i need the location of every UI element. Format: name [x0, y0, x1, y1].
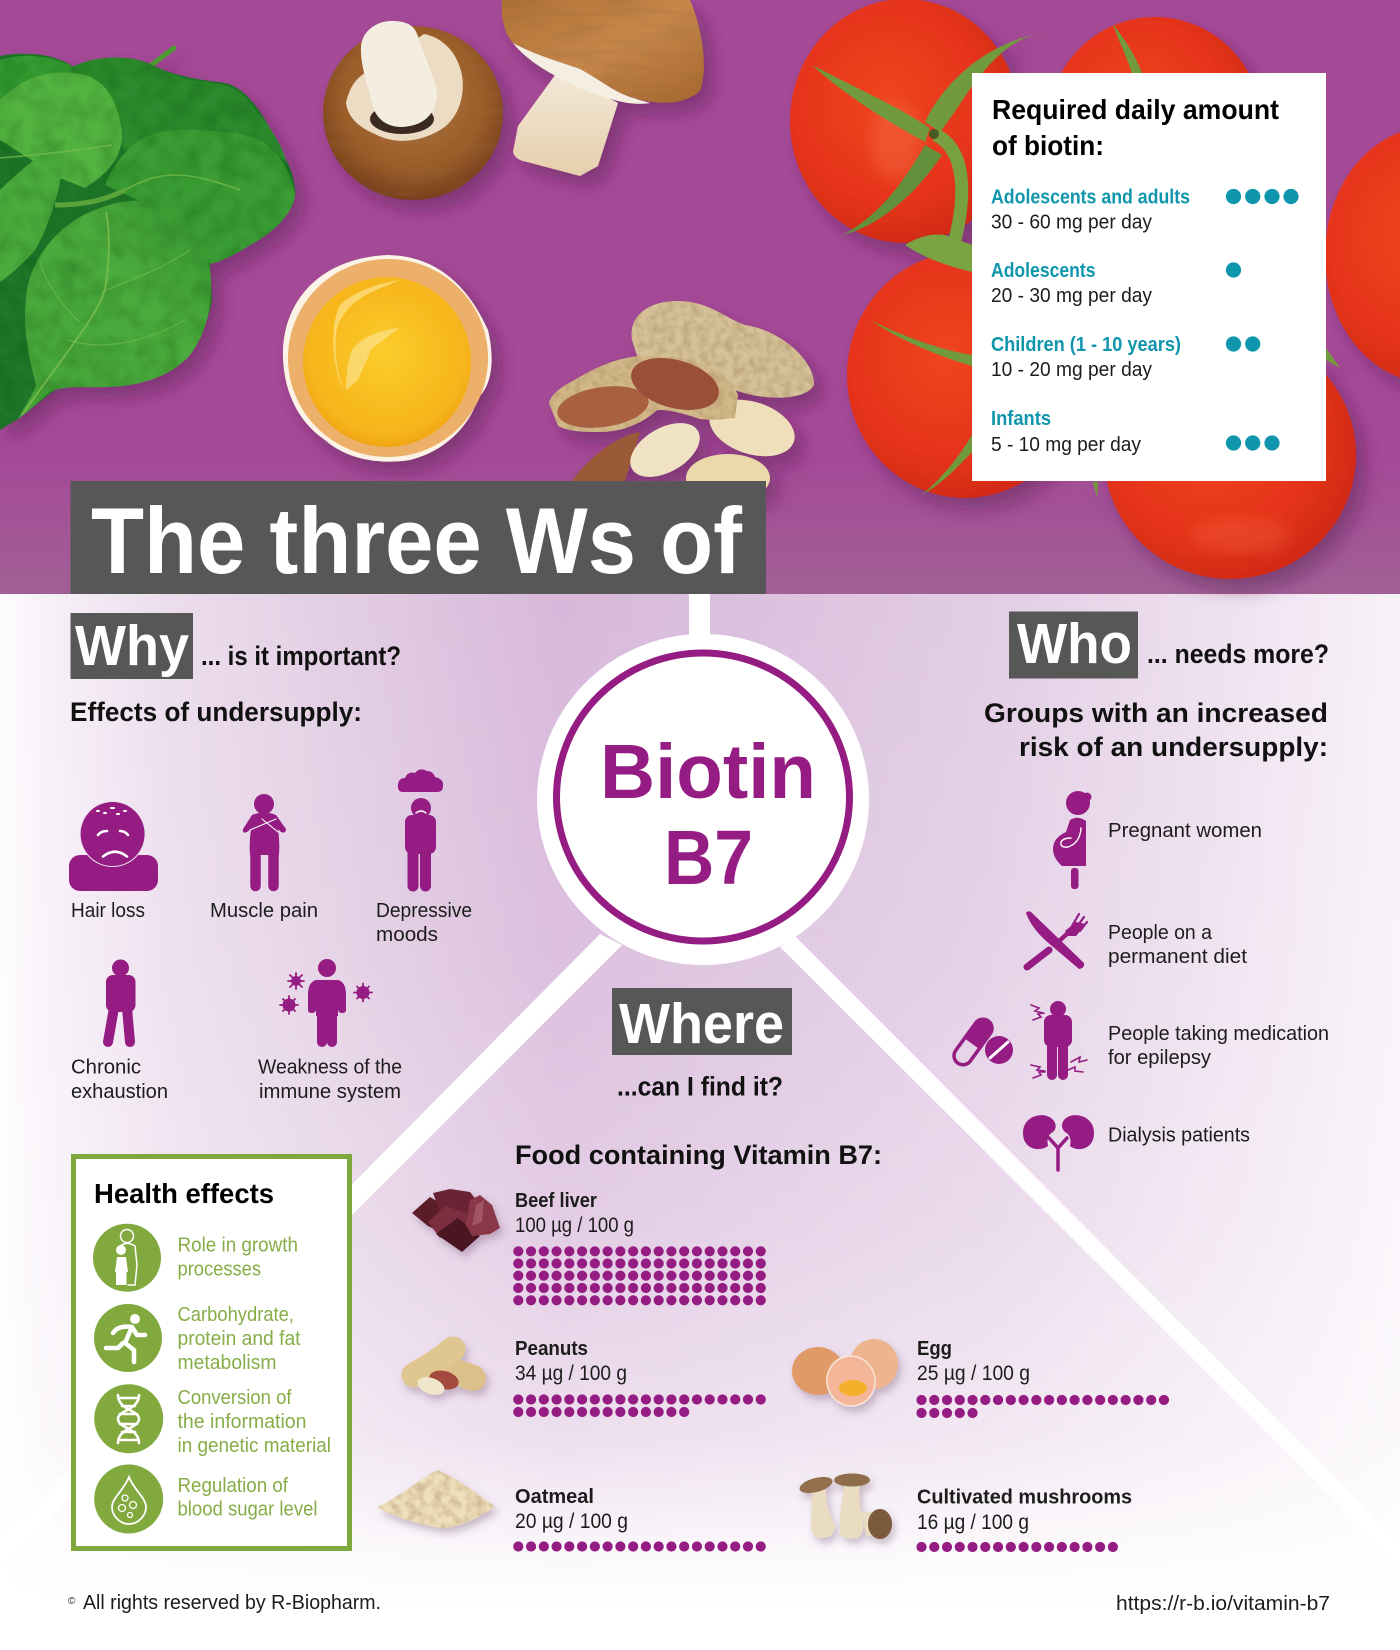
why heading	[70, 613, 401, 679]
food: cultivated mushrooms text and dots: 16 µg / 100 g	[917, 1511, 1029, 1534]
row: adolescents: 20 - 30 mg per day	[991, 284, 1153, 307]
card heading	[992, 94, 1279, 161]
central biotin circle: Biotin	[600, 729, 816, 815]
food: beef liver text and dots	[515, 1189, 762, 1300]
food: cultivated mushrooms photo	[798, 1474, 892, 1539]
footer: copyright: All rights reserved by R-Biopharm.	[83, 1591, 381, 1614]
where heading: ...can I find it?	[617, 1072, 783, 1102]
card heading: of biotin:	[992, 130, 1104, 161]
footer: url: https://r-b.io/vitamin-b7	[1116, 1592, 1330, 1615]
label: Muscle pain	[210, 899, 318, 922]
item: growth: Role in growth	[178, 1234, 298, 1257]
photo: tomatoes	[790, 0, 1400, 579]
food: egg text and dots	[917, 1337, 1164, 1413]
subheading	[984, 698, 1328, 762]
row: infants: 5 - 10 mg per day	[991, 433, 1142, 456]
icon: weakness of the immune system	[280, 959, 372, 1042]
food: oatmeal text and dots: 20 µg / 100 g	[515, 1510, 628, 1533]
icon: depressive moods	[398, 769, 443, 886]
panel: who	[949, 612, 1329, 1170]
row: adolescents and adults	[991, 186, 1299, 234]
food: peanuts text and dots	[515, 1337, 762, 1412]
where heading	[612, 988, 792, 1102]
label	[71, 1056, 168, 1103]
photo: spinach	[0, 48, 295, 430]
label	[258, 1056, 402, 1103]
icon: pregnant woman	[1053, 791, 1092, 889]
icon: knife and fork	[1026, 911, 1087, 969]
panel: health effects	[74, 1156, 350, 1548]
food: oatmeal text and dots: Oatmeal	[515, 1485, 594, 1508]
item: metabolism: protein and fat	[178, 1327, 301, 1350]
photo: peanuts	[549, 301, 814, 502]
white connector lines	[0, 590, 1400, 1567]
item: growth	[93, 1224, 298, 1292]
row: children	[991, 333, 1260, 381]
where heading: Where	[619, 992, 784, 1056]
food: peanuts photo	[414, 1349, 473, 1398]
why heading: Why	[75, 614, 189, 678]
label: moods	[376, 923, 438, 946]
row: adolescents and adults: 30 - 60 mg per day	[991, 210, 1153, 234]
icon: chronic exhaustion	[106, 960, 136, 1042]
top photo band	[0, 0, 1400, 594]
central biotin circle	[537, 634, 869, 965]
label: People taking medication	[1108, 1022, 1329, 1045]
label: Weakness of the	[258, 1056, 402, 1078]
item: metabolism	[94, 1303, 301, 1374]
label: People on a	[1108, 921, 1213, 944]
footer: copyright: ©	[68, 1596, 76, 1607]
title banner: The three Ws of	[91, 488, 743, 593]
item: genetic material: Conversion of	[178, 1386, 292, 1409]
photo: egg	[283, 255, 492, 462]
why heading: ... is it important?	[201, 641, 401, 671]
row: adolescents and adults: Adolescents and adults	[991, 186, 1190, 208]
icon: kidneys	[1023, 1115, 1094, 1170]
icon: hair loss	[69, 801, 158, 891]
item: growth: processes	[178, 1258, 261, 1281]
panel: required daily amount card	[972, 73, 1326, 481]
label: Dialysis patients	[1108, 1124, 1250, 1146]
food: beef liver text and dots: Beef liver	[515, 1189, 597, 1212]
panel: why	[69, 613, 472, 1103]
icon: epilepsy medication	[949, 1001, 1087, 1078]
item: blood sugar	[94, 1464, 318, 1534]
label: Depressive	[376, 899, 472, 922]
food: peanuts text and dots: Peanuts	[515, 1337, 588, 1360]
item: metabolism: metabolism	[178, 1351, 276, 1374]
food: peanuts text and dots: 34 µg / 100 g	[515, 1362, 627, 1385]
item: genetic material: in genetic material	[178, 1434, 331, 1457]
food: egg text and dots: Egg	[917, 1337, 952, 1360]
card heading: Required daily amount	[992, 94, 1279, 125]
item: blood sugar: blood sugar level	[178, 1498, 318, 1521]
row: infants	[991, 407, 1280, 456]
item: blood sugar: Regulation of	[178, 1474, 288, 1497]
who heading: Who	[1017, 612, 1132, 676]
label: immune system	[259, 1080, 401, 1103]
central biotin circle: B7	[664, 815, 753, 901]
label: Chronic	[71, 1056, 141, 1078]
who heading: ... needs more?	[1147, 639, 1329, 669]
item: genetic material: the information	[178, 1410, 306, 1433]
label: exhaustion	[71, 1080, 168, 1103]
label: for epilepsy	[1108, 1046, 1212, 1069]
row: children: 10 - 20 mg per day	[991, 358, 1153, 381]
icon: muscle pain	[243, 794, 286, 886]
row: children: Children (1 - 10 years)	[991, 333, 1181, 356]
food: beef liver text and dots: 100 µg / 100 g	[515, 1214, 634, 1237]
label: Pregnant women	[1108, 819, 1262, 842]
panel: where	[377, 988, 1164, 1547]
label: Hair loss	[71, 899, 145, 922]
label	[1108, 921, 1247, 968]
row: adolescents	[991, 259, 1241, 307]
food: oatmeal photo	[377, 1470, 495, 1528]
row: adolescents: Adolescents	[991, 259, 1096, 282]
label	[376, 899, 472, 946]
lower background	[0, 594, 1400, 1650]
subheading: Groups with an increased	[984, 698, 1328, 728]
heading: Health effects	[94, 1178, 274, 1209]
food: beef liver photo	[412, 1189, 500, 1252]
item: metabolism: Carbohydrate,	[178, 1303, 294, 1326]
food: oatmeal text and dots	[515, 1485, 762, 1546]
subheading: Effects of undersupply:	[70, 697, 362, 727]
subheading: Food containing Vitamin B7:	[515, 1140, 882, 1170]
who heading	[1009, 612, 1329, 678]
food: egg photo	[792, 1339, 898, 1411]
item: genetic material	[94, 1384, 331, 1457]
food: egg text and dots: 25 µg / 100 g	[917, 1362, 1030, 1385]
label	[1108, 1022, 1329, 1069]
photo: mushrooms	[323, 0, 704, 200]
row: infants: Infants	[991, 407, 1051, 430]
label: permanent diet	[1108, 945, 1247, 968]
food: cultivated mushrooms text and dots	[917, 1486, 1132, 1547]
subheading: risk of an undersupply:	[1019, 732, 1328, 762]
food: cultivated mushrooms text and dots: Cultivated mushrooms	[917, 1486, 1132, 1508]
